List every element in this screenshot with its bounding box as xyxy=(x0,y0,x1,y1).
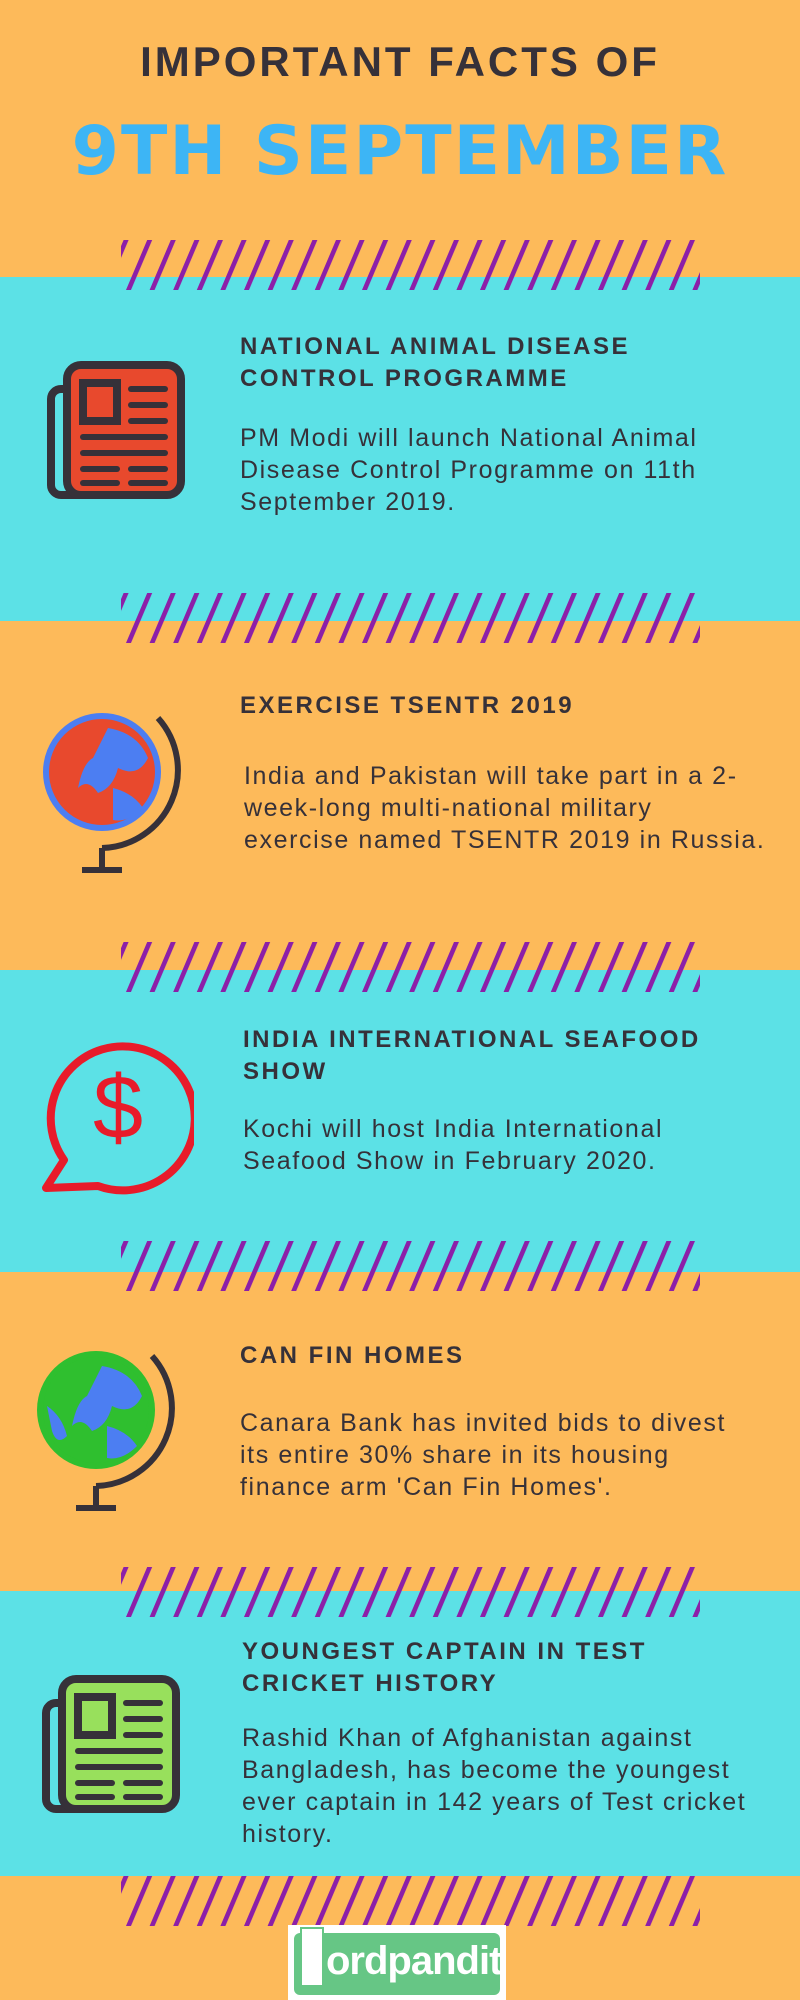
body 4: finance arm 'Can Fin Homes'. xyxy=(240,1473,613,1501)
stripes xyxy=(121,593,700,643)
body 5: Rashid Khan of Afghanistan against xyxy=(242,1724,693,1752)
icon: globe red xyxy=(43,713,181,873)
heading 1 xyxy=(240,333,630,392)
heading 3: INDIA INTERNATIONAL SEAFOOD xyxy=(243,1026,701,1053)
stripes xyxy=(121,1876,700,1926)
subtitle: date: 9TH SEPTEMBER xyxy=(72,112,728,191)
logo: wordpandit: ordpandit xyxy=(326,1939,501,1983)
stripes xyxy=(121,942,700,992)
heading 3 xyxy=(243,1026,701,1085)
icon: dollar bubble: $ xyxy=(93,1058,143,1158)
icon: globe green xyxy=(37,1351,175,1511)
heading 1: NATIONAL ANIMAL DISEASE xyxy=(240,333,630,360)
heading 1: CONTROL PROGRAMME xyxy=(240,365,569,392)
heading 5: YOUNGEST CAPTAIN IN TEST xyxy=(242,1638,647,1665)
logo: wordpandit xyxy=(288,1925,506,2000)
body 4: Canara Bank has invited bids to divest xyxy=(240,1409,726,1437)
heading 5 xyxy=(242,1638,647,1697)
icon: red newspaper xyxy=(47,361,185,499)
body 4: its entire 30% share in its housing xyxy=(240,1441,670,1469)
body 3: Seafood Show in February 2020. xyxy=(243,1147,657,1175)
heading 3: SHOW xyxy=(243,1058,328,1085)
body 2: week-long multi-national military xyxy=(244,794,652,822)
body 3 xyxy=(243,1115,663,1175)
stripes xyxy=(121,1567,700,1617)
body 5: ever captain in 142 years of Test cricket xyxy=(242,1788,746,1816)
icon: dollar bubble xyxy=(42,1042,194,1194)
body 2: exercise named TSENTR 2019 in Russia. xyxy=(244,826,765,854)
body 5 xyxy=(242,1724,746,1848)
body 3: Kochi will host India International xyxy=(243,1115,663,1143)
body 2 xyxy=(244,762,765,854)
body 1: PM Modi will launch National Animal xyxy=(240,424,698,452)
heading 4: CAN FIN HOMES xyxy=(240,1342,464,1369)
body 4 xyxy=(240,1409,726,1501)
heading 5: CRICKET HISTORY xyxy=(242,1670,498,1697)
heading 2: EXERCISE TSENTR 2019 xyxy=(240,692,574,719)
body 5: history. xyxy=(242,1820,334,1848)
stripes xyxy=(121,1241,700,1291)
body 5: Bangladesh, has become the youngest xyxy=(242,1756,730,1784)
title: IMPORTANT FACTS OF xyxy=(140,38,660,85)
body 2: India and Pakistan will take part in a 2- xyxy=(244,762,738,790)
body 1 xyxy=(240,424,698,516)
body 1: September 2019. xyxy=(240,488,456,516)
stripes xyxy=(121,240,700,290)
body 1: Disease Control Programme on 11th xyxy=(240,456,697,484)
icon: green newspaper xyxy=(42,1675,180,1813)
